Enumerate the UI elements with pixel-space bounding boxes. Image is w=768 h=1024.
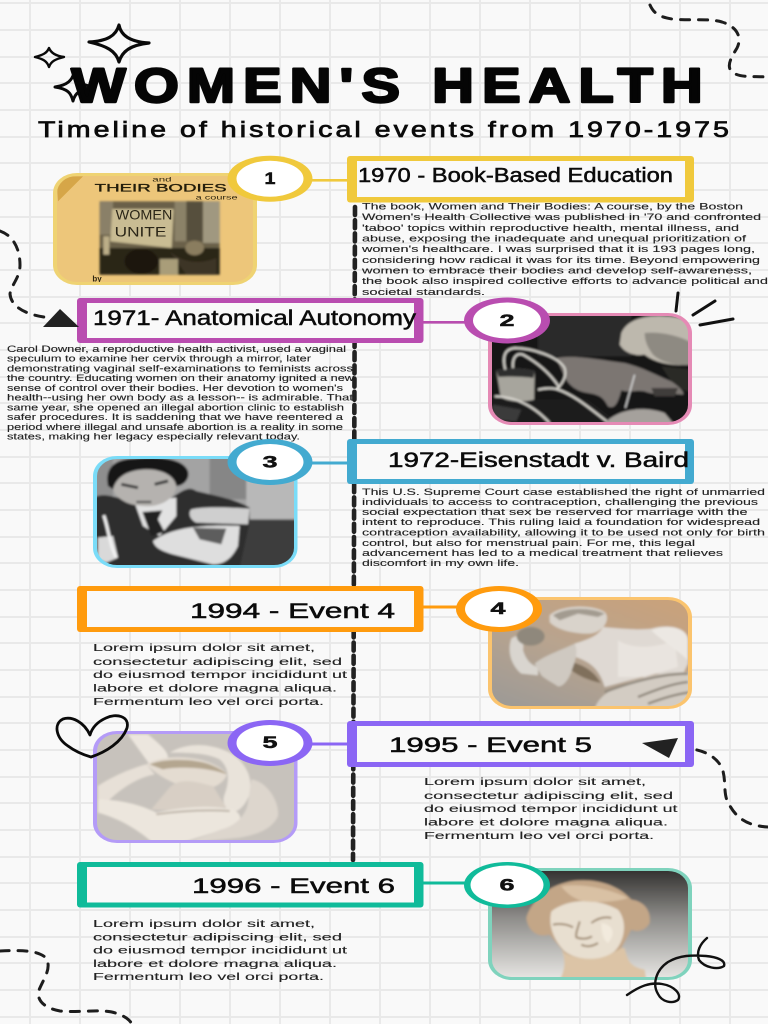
- text block 1: 'taboo' topics within reproductive health, mental illness, and: [362, 223, 739, 233]
- text block 6: Lorem ipsum dolor sit amet,: [93, 919, 315, 930]
- timeline dashed line: [353, 207, 355, 860]
- badge 4: 4: [490, 599, 506, 618]
- text block 1: abuse, exposing the inadequate and unequal prioritization of: [362, 234, 747, 244]
- connector 3: [311, 462, 349, 464]
- icon: small sparkle: [35, 48, 64, 67]
- text block 2: the country. Educating women on their anatomy ignited a new: [7, 373, 355, 383]
- text block 1: The book, Women and Their Bodies: A course, by the Boston: [362, 202, 743, 212]
- photo 4: Bacchus statue: [488, 597, 692, 709]
- doodle: dashed curve to event 5 arrow: [679, 748, 768, 827]
- text block 1: the book also inspired collective efforts to advance political and: [362, 276, 768, 286]
- text block 6: consectetur adipiscing elit, sed: [93, 932, 342, 944]
- icon: heart doodle: [57, 716, 127, 757]
- text block 2: health--using her own body as a lesson-- is admirable. That: [7, 392, 354, 402]
- photo 1: book cover: a course: [196, 196, 239, 202]
- heading box 6: 1996 - Event 6: [192, 875, 395, 898]
- text block 5: Fermentum leo vel orci porta.: [424, 831, 654, 842]
- badge 6: 6: [500, 876, 514, 894]
- event 6: [77, 862, 692, 983]
- text block 2: safer procedures. It is saddening that we have reentered a: [7, 412, 343, 422]
- text block 1: Women's Health Collective was published in '70 and confronted: [362, 212, 761, 222]
- text block 3: intent to reproduce. This ruling laid a foundation for widespread: [362, 517, 760, 527]
- doodle: top right dashed curve: [650, 5, 768, 77]
- event 5: [93, 720, 694, 843]
- badge 1: [228, 156, 312, 202]
- text block 3: social expectation that sex be reserved for marriage with the: [362, 507, 748, 517]
- heading box 3: [347, 439, 694, 484]
- badge 3: 3: [262, 452, 278, 472]
- badge 4: [456, 586, 542, 632]
- badge 1: 1: [264, 169, 276, 188]
- text block 3: control, but also for menstrual pain. For me, this legal: [362, 538, 695, 548]
- text block 3: individuals to access to contraception, challenging the previous: [362, 497, 759, 507]
- text block 2: speculum to examine her cervix through a mirror, later: [7, 354, 311, 364]
- badge 2: [464, 298, 550, 344]
- heading box 1: 1970 - Book-Based Education: [358, 164, 673, 187]
- text block 4: Fermentum leo vel orci porta.: [93, 697, 324, 708]
- text block 6: do eiusmod tempor incididunt ut: [93, 946, 347, 956]
- badge 2: 2: [500, 311, 514, 330]
- photo 6: marble bust: [488, 868, 692, 980]
- doodle: left dashed curve: [0, 231, 44, 317]
- text block 6: Fermentum leo vel orci porta.: [93, 972, 324, 983]
- text block 2: states, making her legacy especially relevant today.: [7, 432, 300, 442]
- text block 3: advancement has led to a medical treatment that relieves: [362, 548, 724, 558]
- event 2: [7, 298, 692, 442]
- connector 1: [311, 179, 349, 182]
- heading box 2: 1971- Anatomical Autonomy: [93, 307, 417, 330]
- text block 3: contraception availability, allowing it to be used not only for birth: [362, 528, 765, 538]
- connector 4: [422, 606, 458, 608]
- text block 3: discomfort in my own life.: [362, 558, 519, 568]
- photo 1: book cover: and: [152, 177, 172, 183]
- connector 2: [422, 321, 466, 324]
- photo 1: book cover: [53, 173, 257, 285]
- heading box 2: [77, 298, 424, 343]
- badge 3: [228, 439, 312, 485]
- text block 1: considering how radical it was for its time. Beyond empowering: [362, 255, 760, 265]
- photo 1: book cover: UNITE: [115, 223, 166, 239]
- badge 5: [228, 720, 312, 766]
- text block 5: do eiusmod tempor incididunt ut: [424, 804, 678, 815]
- text block 1: societal standards.: [362, 287, 485, 297]
- event 3: [93, 439, 765, 568]
- text block 5: Lorem ipsum dolor sit amet,: [424, 777, 646, 788]
- heading box 4: [77, 586, 424, 632]
- heading box 4: 1994 - Event 4: [190, 600, 395, 623]
- text block 2: same year, she opened an illegal abortion clinic to establish: [7, 402, 344, 412]
- photo 1: book cover: THEIR BODIES: [95, 183, 227, 195]
- photo 1: book cover: WOMEN: [116, 207, 172, 223]
- photo 2: woman with cat: [488, 313, 692, 425]
- text block 4: consectetur adipiscing elit, sed: [93, 657, 342, 668]
- heading box 5: [347, 721, 694, 767]
- icon: spark lines near photo 2: [676, 293, 733, 325]
- photo 5: Psyche statue: [93, 731, 298, 843]
- text block 5: consectetur adipiscing elit, sed: [424, 791, 673, 802]
- heading box 5: 1995 - Event 5: [389, 734, 592, 757]
- text block 3: [362, 487, 765, 568]
- text block 4: do eiusmod tempor incididunt ut: [93, 670, 347, 681]
- text block 6: [93, 919, 347, 983]
- text block 6: labore et dolore magna aliqua.: [93, 959, 337, 970]
- icon: big sparkle: [89, 25, 149, 62]
- heading box 6: [77, 862, 424, 908]
- photo 3: man with contraceptive: [93, 456, 298, 568]
- text block 2: sense of control over their bodies. Her devotion to women's: [7, 383, 344, 393]
- title: WOMEN'S HEALTH: [71, 59, 703, 113]
- text block 2: Carol Downer, a reproductive health activist, used a vaginal: [7, 344, 346, 354]
- subtitle: Timeline of historical events from 1970-1975: [38, 118, 729, 142]
- heading box 3: 1972-Eisenstadt v. Baird: [388, 449, 689, 472]
- text block 1: [360, 202, 768, 297]
- text block 1: women to embrace their bodies and develop self-awareness,: [360, 266, 752, 276]
- connector 5: [311, 742, 349, 746]
- text block 2: demonstrating vaginal self-examinations to feminists across: [7, 364, 354, 374]
- event 4: [77, 586, 692, 709]
- icon: sparkle behind title: [55, 73, 94, 101]
- heading box 1: [347, 156, 694, 202]
- text block 2: [7, 344, 355, 442]
- text block 5: [424, 777, 678, 842]
- text block 1: women's healthcare. I was surprised that it is 193 pages long,: [360, 244, 755, 254]
- badge 6: [464, 862, 550, 908]
- text block 4: labore et dolore magna aliqua.: [93, 684, 337, 694]
- text block 4: Lorem ipsum dolor sit amet,: [93, 643, 315, 654]
- event 1: [53, 156, 768, 297]
- photo 1: book cover: by: [92, 275, 102, 284]
- icon: triangle arrow event 2: [43, 309, 79, 327]
- text block 5: labore et dolore magna aliqua.: [424, 818, 668, 828]
- text block 3: This U.S. Supreme Court case established the right of unmarried: [362, 487, 765, 497]
- text block 2: period where illegal and unsafe abortion is a reality in some: [7, 422, 343, 432]
- badge 5: 5: [262, 733, 278, 752]
- doodle: scribble loops: [627, 938, 724, 1002]
- text block 4: [93, 643, 347, 708]
- connector 6: [422, 882, 466, 884]
- icon: triangle arrow event 5: [642, 738, 678, 758]
- doodle: bottom left dashed curve: [0, 951, 132, 1024]
